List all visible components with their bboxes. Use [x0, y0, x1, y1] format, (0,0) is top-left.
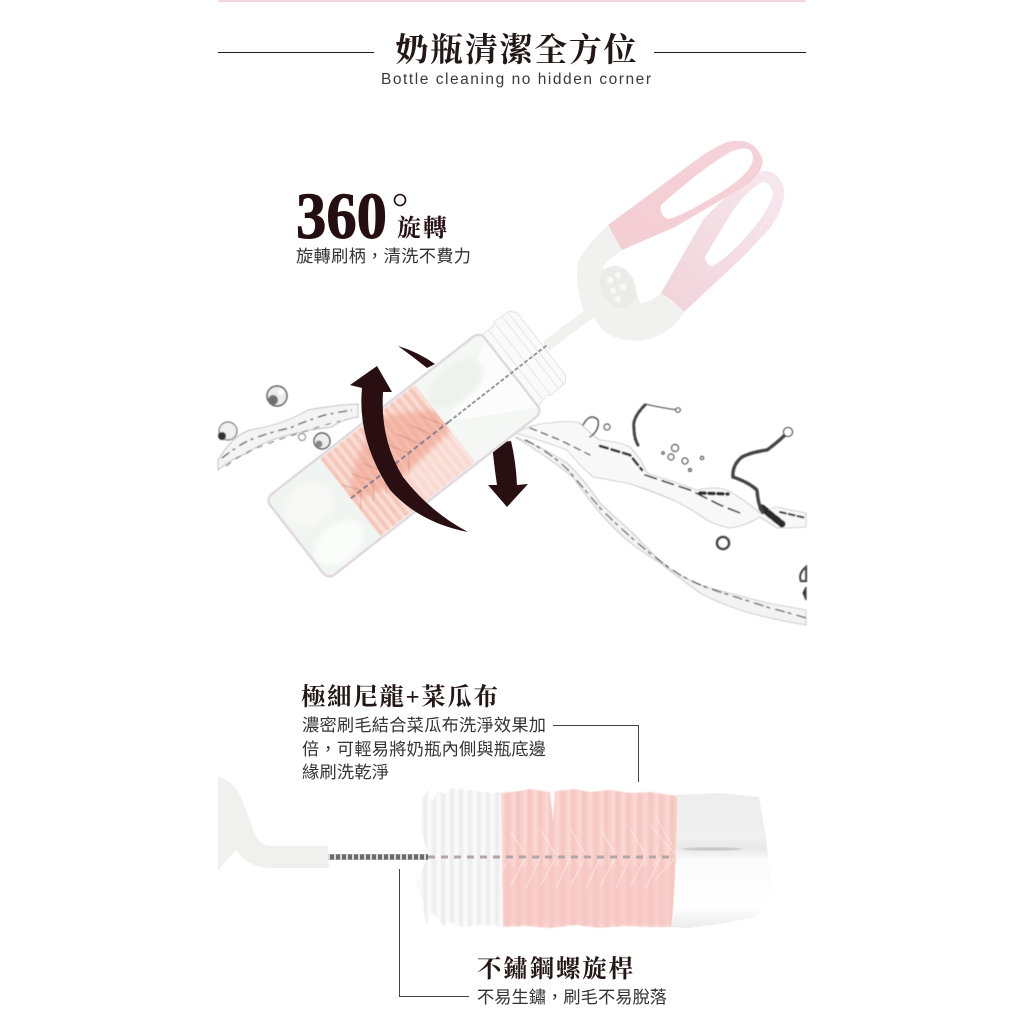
white grip — [577, 225, 684, 341]
callout line: steel rod — [400, 869, 469, 996]
cotton head — [265, 454, 386, 580]
top pink strip — [218, 0, 806, 2]
title block — [218, 32, 806, 88]
bottle contents — [320, 360, 482, 537]
lower water stream — [515, 437, 806, 625]
brush handle base — [218, 777, 329, 871]
text block: stainless spiral rod: 不鏽鋼螺旋桿 — [477, 955, 634, 983]
cotton head — [671, 793, 775, 928]
water tendrils — [583, 404, 787, 513]
rotation arrow: down — [488, 441, 528, 507]
stream shading — [525, 440, 806, 618]
text block: 360 rotation: 旋轉刷柄，清洗不費力 — [296, 246, 471, 266]
handle — [577, 141, 784, 341]
text block: 360 rotation: 旋轉 — [397, 215, 447, 242]
bottle with brush — [265, 303, 579, 580]
text block: nylon and loofah: 濃密刷毛結合菜瓜布洗淨效果加 — [302, 715, 546, 735]
text block: stainless spiral rod: 不易生鏽，刷毛不易脫落 — [477, 987, 667, 1007]
pink bristles — [501, 789, 678, 928]
feather strokes — [342, 415, 444, 509]
cotton core mark — [315, 519, 324, 527]
rotation arrow: top tail behind bottle — [398, 346, 435, 368]
text block: stainless spiral rod — [477, 955, 667, 1007]
pink bristles — [320, 383, 478, 536]
bottle outline — [265, 332, 543, 580]
stream dark highlights — [530, 428, 806, 524]
brush detail — [218, 777, 775, 928]
front loop pink — [608, 141, 763, 250]
infographic canvas — [217, 0, 808, 1005]
rotary hub — [593, 260, 643, 314]
text block: 360 rotation — [296, 180, 471, 266]
text block: 360 rotation: 360 — [296, 180, 387, 253]
water droplets — [604, 408, 806, 600]
text block: nylon and loofah: 極細尼龍+菜瓜布 — [301, 683, 498, 711]
bottle neck — [480, 307, 571, 407]
water splash: left — [218, 386, 358, 470]
water splash: right — [515, 404, 806, 625]
subtitle: Bottle cleaning no hidden corner — [381, 71, 651, 88]
steel spiral rod — [328, 854, 428, 860]
back loop pink — [661, 171, 784, 312]
brush stem — [546, 310, 594, 346]
upper water stream — [515, 422, 806, 528]
white bristles — [417, 788, 503, 927]
callout line: nylon — [553, 726, 638, 782]
rotation arrow: main curved — [350, 366, 468, 532]
bristle feather shading — [496, 815, 675, 888]
brush core wire — [351, 422, 449, 498]
text block: nylon and loofah: 緣刷洗乾淨 — [302, 762, 389, 782]
text block: nylon and loofah — [301, 683, 546, 782]
white bristles — [414, 382, 478, 462]
heading: title: 奶瓶清潔全方位 — [396, 32, 636, 69]
text block: nylon and loofah: 倍，可輕易將奶瓶內側與瓶底邊 — [302, 739, 546, 759]
bottle glass body — [265, 332, 543, 580]
